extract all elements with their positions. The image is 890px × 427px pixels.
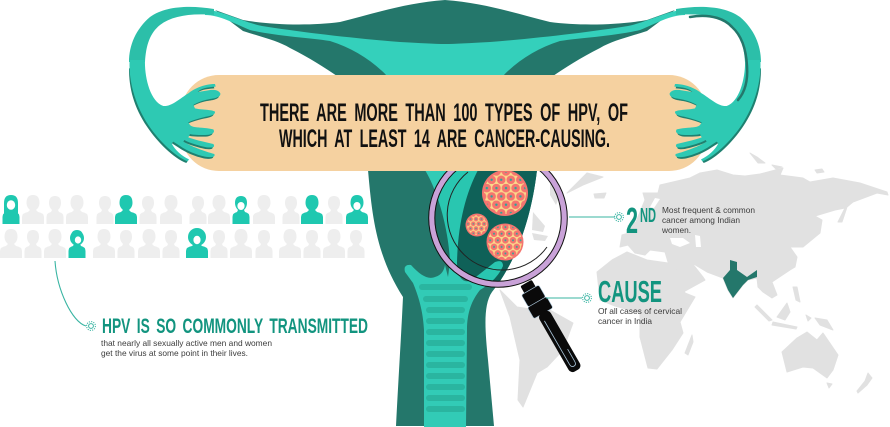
banner text: THERE ARE MORE THAN 100 TYPES OF HPV, OF [260,99,628,127]
map: South America [500,290,573,407]
map: Australia [782,332,838,378]
lens handle [516,278,586,376]
map gaps [650,198,701,247]
stat text [661,205,755,235]
uterus [129,0,761,427]
uterine cavity and cervical canal [405,170,503,427]
stat 2nd: 2 [626,200,638,241]
map: Greenland, Iceland and Arctic islands [567,153,824,198]
uterus body and neck [368,170,537,426]
callout heading: HPV IS SO COMMONLY TRANSMITTED [102,315,368,338]
stat text [598,306,682,326]
stat 2nd [626,200,656,241]
map: Tasmania and New Zealand [827,373,872,393]
lens contents [436,171,558,281]
connector node [583,294,591,302]
cervical ribs [419,284,472,412]
connector line [546,297,582,299]
faces [7,200,361,244]
stat text: cancer among Indian [662,215,740,225]
left hand [129,60,220,163]
right hand [670,60,761,163]
callout text: get the virus at some point in their lives. [101,348,248,358]
map: Africa [597,252,695,369]
connector line [55,261,86,326]
stat 2nd: ND [640,205,656,227]
banner text: WHICH AT LEAST 14 ARE CANCER-CAUSING. [279,125,610,153]
people row 2 [0,229,364,258]
map: Southeast Asian islands [755,287,833,330]
hands holding the banner [129,16,761,163]
uterus top with tubes [129,0,445,76]
banner panel [181,75,707,171]
callout: HPV transmitted [55,261,368,358]
magnifying glass [428,171,580,372]
callout: 2nd [569,200,755,241]
banner [181,75,707,171]
connector node [87,322,95,330]
lens ring [432,152,564,284]
connector line [569,216,615,218]
stat text: Of all cases of cervical [598,306,682,316]
map: North America fragments [532,178,560,241]
right tube inner shading [690,16,747,100]
people icon grid [0,195,368,258]
stat text: cancer in India [598,316,652,326]
callout text [101,338,272,358]
banner text [260,99,628,153]
callout text: that nearly all sexually active men and women [101,338,272,348]
India highlight [723,260,757,298]
world map [500,153,888,407]
map: Madagascar [685,335,693,355]
callout: cause [546,274,682,326]
stat text: Most frequent & common [662,205,755,215]
hair [4,195,206,246]
cancer cells [466,170,528,260]
map: Eurasia [620,168,888,298]
people row 1 [2,195,368,224]
connector node [615,213,623,221]
stat cause: CAUSE [598,274,662,309]
stat text: women. [661,225,691,235]
